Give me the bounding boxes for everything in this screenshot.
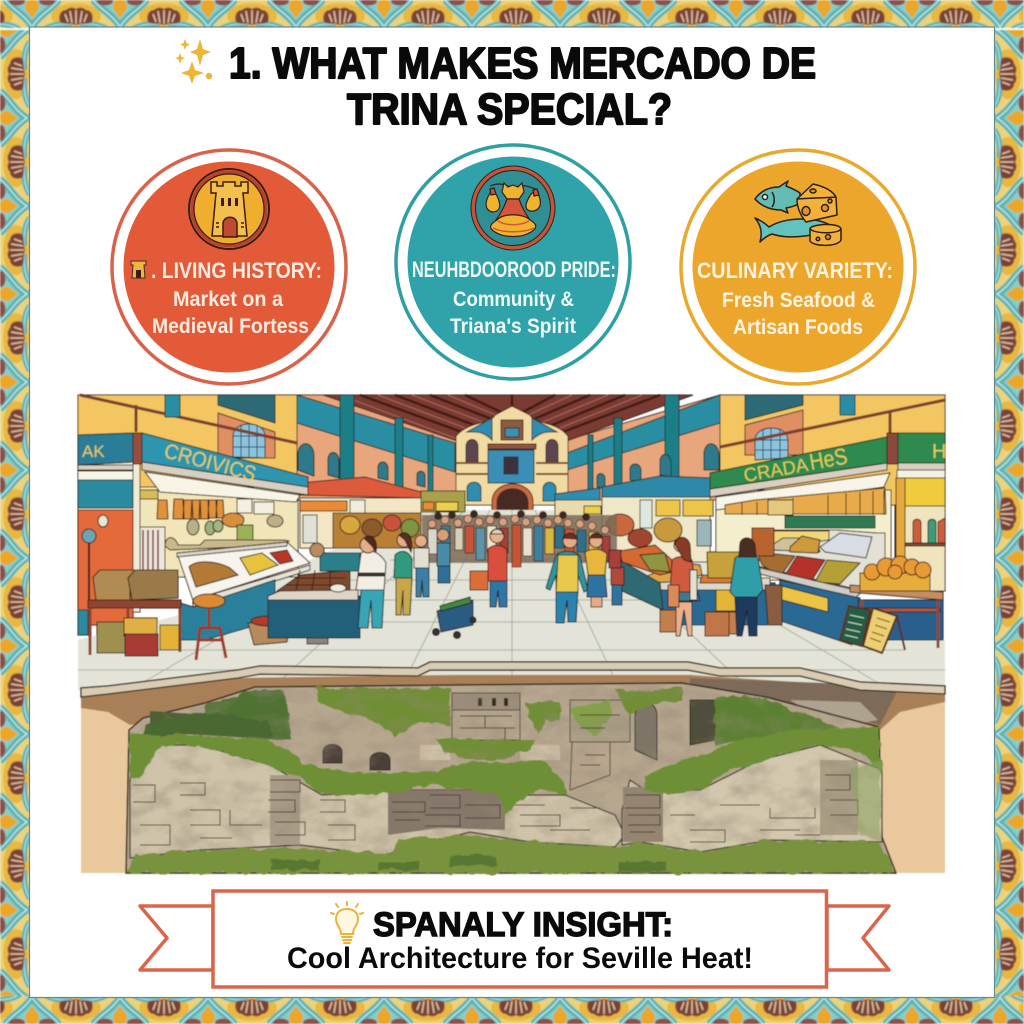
ribbon tails <box>140 906 889 970</box>
text: culinary description: Artisan Foods <box>733 316 863 339</box>
shopper: teal sweater <box>730 538 763 636</box>
shopper: yellow vest <box>546 533 588 623</box>
shop sign lettering: H <box>932 441 946 463</box>
counter <box>778 580 860 645</box>
heading: living history: . LIVING HISTORY: <box>151 258 322 283</box>
heading: insight: SPANALY INSIGHT: <box>373 906 673 944</box>
shopper: man in white <box>356 536 386 628</box>
right balcony and window <box>745 410 803 455</box>
railings <box>80 395 945 447</box>
left balcony and window <box>218 413 275 458</box>
baskets and table <box>93 570 138 600</box>
shop sign lettering: AK <box>82 442 105 461</box>
right stall <box>620 433 945 653</box>
shopper: grey shirt <box>414 535 429 597</box>
hanging goods <box>157 499 224 519</box>
bucket <box>307 620 328 644</box>
display case <box>177 542 310 600</box>
text: neighborhood description: Community & <box>453 288 574 311</box>
produce display <box>757 530 885 590</box>
panel: culinary variety <box>681 150 915 384</box>
text: neighborhood description <box>450 288 576 338</box>
text: culinary description: Fresh Seafood & <box>722 289 875 312</box>
title: TRINA SPECIAL? <box>347 85 672 134</box>
shopper: yellow top <box>585 533 607 607</box>
bricks <box>133 715 858 845</box>
text: living history description: Medieval Fortess <box>152 315 309 338</box>
icon: castle tower <box>189 169 269 249</box>
moss upper <box>205 688 840 760</box>
shopper: blue vest <box>437 529 450 583</box>
text: insight message: Cool Architecture for Seville Heat! <box>287 942 753 975</box>
icon: flamenco dress <box>471 166 555 250</box>
heading: neighborhood pride: NEUHBDOOROOD PRIDE: <box>412 257 616 282</box>
panel: living history <box>112 150 346 384</box>
shop sign lettering: CRADA <box>742 455 810 487</box>
stool <box>193 594 225 608</box>
text: neighborhood description: Triana's Spirit <box>450 315 576 338</box>
sand cross-section <box>81 690 945 873</box>
text: living history description: Market on a <box>173 288 283 311</box>
shop sign lettering <box>82 440 946 487</box>
insight banner <box>140 891 889 987</box>
title: 1. WHAT MAKES MERCADO DE <box>229 39 816 88</box>
shop sign lettering: HeS <box>807 443 849 475</box>
shopper: woman with bag <box>668 537 700 636</box>
shoppers <box>356 529 763 638</box>
shopper: red shirt with basket <box>470 529 507 607</box>
text: living history description <box>152 288 309 338</box>
market stalls far background <box>300 476 713 562</box>
illustration: market hall interior <box>78 395 946 690</box>
front wall <box>130 745 625 858</box>
moss bands <box>126 712 896 873</box>
orange signs <box>725 488 886 514</box>
center counter <box>268 596 360 638</box>
panel: neighborhood pride <box>396 145 630 379</box>
floor <box>78 510 945 690</box>
chalkboards <box>840 606 870 646</box>
cart <box>432 597 476 638</box>
heading: culinary variety: CULINARY VARIETY: <box>697 258 893 283</box>
illustration: fortress ruins underground <box>81 662 945 873</box>
basket of tomatoes <box>248 623 290 645</box>
icon: light bulb <box>331 902 363 943</box>
shopper: behind red stall <box>609 550 624 605</box>
columns, windows on the side walls <box>80 395 945 493</box>
text: culinary description <box>722 289 875 339</box>
roof <box>323 395 693 441</box>
left stall <box>78 433 360 660</box>
facade <box>456 406 568 515</box>
shopper: woman in green <box>394 533 412 615</box>
icon: sparkles <box>175 39 212 84</box>
title <box>229 39 816 134</box>
ruin back wall <box>126 683 896 873</box>
stone mottling <box>126 683 896 873</box>
back walls <box>78 395 945 505</box>
right fruit table <box>858 600 943 640</box>
green stall counter <box>620 560 663 610</box>
icon: fish and cheese <box>755 181 841 245</box>
crowd <box>422 510 617 567</box>
shop sign lettering: CROIVICS <box>162 440 258 486</box>
paving ledge <box>81 662 945 697</box>
